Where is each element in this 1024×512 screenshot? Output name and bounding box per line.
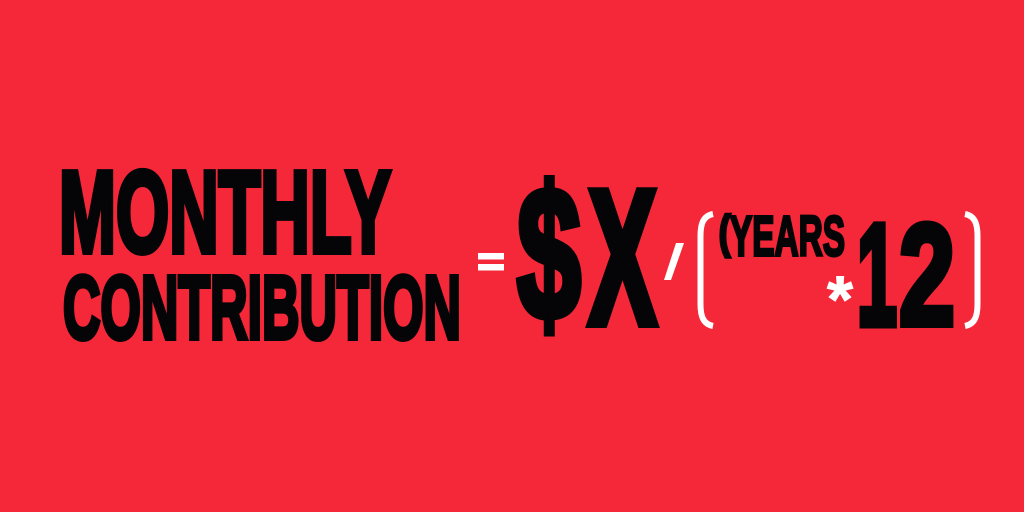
dollar x term: $ [517,148,581,358]
number twelve: 2 [899,194,955,356]
dollar x term: X [589,152,656,364]
years label [719,204,845,268]
left bracket [700,214,713,326]
multiply asterisk: * [827,262,853,336]
years label: YEARS [730,204,845,268]
right bracket [965,214,978,326]
heading: monthly: MONTHLY [59,147,391,277]
heading: contribution: CONTRIBUTION [63,258,461,358]
years label: ( [719,206,730,258]
division slash [664,243,684,280]
number twelve: 1 [857,194,897,356]
equals sign [478,253,504,270]
